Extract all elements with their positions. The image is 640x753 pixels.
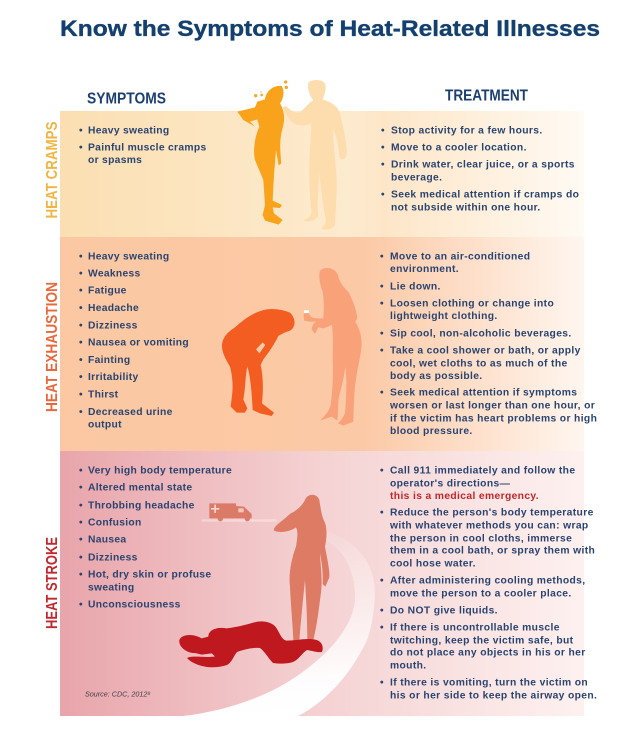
treatment list: heat exhaustion: Sip cool, non-alcoholic beverages. [390, 328, 572, 340]
treatment list: heat stroke: move the person to a cooler place. [390, 588, 572, 600]
symptoms list: heat cramps [79, 126, 206, 166]
symptoms list: heat stroke: Hot, dry skin or profuse [88, 570, 211, 580]
symptoms list: heat exhaustion: • [79, 390, 83, 400]
illustration: heat cramps figures [237, 80, 347, 230]
treatment list: heat stroke: Do NOT give liquids. [390, 606, 498, 616]
symptoms list: heat exhaustion: • [79, 252, 83, 262]
treatment list: heat cramps: Stop activity for a few hours. [391, 126, 543, 136]
treatment list: heat stroke: Call 911 immediately and follow the [390, 466, 575, 476]
treatment list: heat exhaustion: cool, wet cloths to as much of the [390, 358, 568, 370]
title: Know the Symptoms of Heat-Related Illnesses [60, 16, 600, 41]
treatment list: heat cramps: • [381, 142, 385, 154]
treatment list: heat stroke: the person in cool cloths, immerse [390, 534, 572, 544]
symptoms list: heat exhaustion: • [79, 355, 83, 366]
treatment list: heat stroke: mouth. [390, 660, 426, 672]
symptoms list: heat exhaustion: Fatigue [88, 286, 127, 296]
symptoms list: heat exhaustion: • [79, 268, 83, 280]
symptoms list: heat stroke: • [79, 600, 83, 610]
symptoms list: heat stroke: • [79, 500, 83, 512]
treatment list: heat stroke: Reduce the person's body temperature [390, 508, 594, 518]
source note: Source: CDC, 2012⁸ [85, 690, 150, 698]
treatment list: heat stroke: • [380, 606, 384, 616]
panel: heat stroke [44, 451, 597, 716]
label: heat cramps: HEAT CRAMPS [44, 121, 61, 218]
treatment list: heat stroke [380, 466, 597, 702]
icon: dizzy marks [254, 80, 288, 97]
figure: helper man [283, 80, 347, 230]
illustration: heat exhaustion figures [222, 268, 362, 426]
treatment list: heat stroke: cool hose water. [390, 558, 476, 570]
symptoms list: heat exhaustion: Heavy sweating [88, 252, 169, 262]
treatment list: heat cramps: • [381, 126, 385, 136]
treatment list: heat stroke: this is a medical emergency. [390, 491, 539, 502]
symptoms list: heat stroke: Dizziness [88, 552, 138, 564]
treatment list: heat exhaustion: worsen or last longer than one hour, or [389, 400, 595, 412]
treatment list: heat cramps: beverage. [391, 172, 442, 184]
symptoms list: heat cramps: • [79, 142, 83, 154]
treatment list: heat stroke: do not place any objects in his or her [390, 648, 586, 658]
treatment list: heat exhaustion: • [380, 282, 384, 292]
treatment list: heat cramps: Drink water, clear juice, or a sports [391, 160, 575, 170]
figure: woman on phone [274, 495, 329, 641]
treatment list: heat exhaustion: Seek medical attention if symptoms [390, 388, 577, 398]
symptoms list: heat exhaustion [79, 252, 189, 430]
treatment list: heat cramps: • [381, 160, 385, 170]
symptoms list: heat exhaustion: • [79, 286, 83, 296]
figure: woman with cramps [237, 86, 284, 225]
symptoms list: heat stroke: Confusion [88, 518, 142, 528]
treatment list: heat cramps: • [381, 190, 385, 200]
symptoms list: heat stroke: Very high body temperature [88, 466, 232, 476]
symptoms list: heat exhaustion: Fainting [88, 355, 130, 366]
treatment list: heat exhaustion: • [380, 252, 384, 262]
symptoms list: heat stroke [79, 466, 232, 610]
symptoms list: heat exhaustion: Decreased urine [88, 407, 173, 418]
treatment list: heat stroke: his or her side to keep the airway open. [390, 690, 597, 702]
symptoms list: heat cramps: or spasms [88, 155, 142, 166]
label: heat exhaustion: HEAT EXHAUSTION [44, 282, 61, 412]
treatment list: heat stroke: If there is uncontrollable muscle [390, 622, 560, 634]
treatment list: heat stroke: operator's directions— [390, 478, 511, 490]
treatment list: heat exhaustion: • [380, 388, 384, 398]
symptoms list: heat stroke: Altered mental state [88, 482, 192, 494]
symptoms list: heat exhaustion: Headache [88, 303, 139, 314]
symptoms list: heat stroke: Unconsciousness [88, 600, 181, 610]
treatment list: heat stroke: • [380, 576, 384, 586]
symptoms list: heat exhaustion: output [88, 420, 122, 430]
treatment list: heat exhaustion: lightweight clothing. [390, 311, 498, 322]
treatment list: heat exhaustion: • [380, 328, 384, 340]
treatment list: heat exhaustion: Move to an air-conditioned [390, 252, 530, 262]
treatment list: heat exhaustion [380, 252, 597, 437]
symptoms list: heat stroke: • [79, 482, 83, 494]
icon: ambulance [209, 503, 252, 521]
heading: treatment: TREATMENT [445, 88, 528, 105]
treatment list: heat exhaustion: body as possible. [390, 371, 483, 382]
symptoms list: heat cramps: • [79, 126, 83, 136]
treatment list: heat exhaustion: environment. [390, 264, 459, 275]
treatment list: heat exhaustion: Loosen clothing or change into [390, 298, 554, 310]
symptoms list: heat cramps: Painful muscle cramps [88, 142, 206, 154]
symptoms list: heat exhaustion: • [79, 320, 83, 332]
treatment list: heat cramps: Move to a cooler location. [391, 142, 527, 154]
symptoms list: heat exhaustion: Nausea or vomiting [88, 338, 189, 348]
figure: bent-over man [222, 309, 294, 416]
symptoms list: heat exhaustion: • [79, 303, 83, 314]
treatment list: heat cramps: Seek medical attention if cramps do [391, 190, 579, 200]
treatment list: heat exhaustion: if the victim has heart problems or high [390, 414, 597, 424]
illustration: heat stroke scene [179, 495, 375, 716]
heading: symptoms: SYMPTOMS [87, 90, 166, 107]
symptoms list: heat stroke: • [79, 534, 83, 546]
symptoms list: heat exhaustion: • [79, 338, 83, 348]
panel: heat exhaustion [44, 237, 597, 451]
treatment list: heat stroke: twitching, keep the victim safe, but [390, 636, 574, 646]
treatment list: heat exhaustion: • [380, 346, 384, 356]
road curve [183, 532, 375, 716]
symptoms list: heat exhaustion: • [79, 372, 83, 383]
treatment list: heat stroke: • [380, 678, 384, 688]
symptoms list: heat cramps: Heavy sweating [88, 126, 169, 136]
symptoms list: heat exhaustion: Thirst [88, 390, 119, 400]
symptoms list: heat stroke: • [79, 552, 83, 564]
road line [202, 519, 277, 522]
treatment list: heat exhaustion: • [380, 298, 384, 310]
treatment list: heat exhaustion: Take a cool shower or bath, or apply [390, 346, 581, 356]
treatment list: heat stroke: After administering cooling methods, [390, 576, 585, 586]
label: heat stroke: HEAT STROKE [44, 537, 61, 629]
treatment list: heat stroke: If there is vomiting, turn the victim on [390, 678, 588, 688]
treatment list: heat exhaustion: blood pressure. [390, 426, 473, 437]
symptoms list: heat exhaustion: • [79, 407, 83, 418]
symptoms list: heat exhaustion: Weakness [88, 268, 141, 280]
symptoms list: heat exhaustion: Irritability [88, 372, 139, 383]
treatment list: heat stroke: • [380, 622, 384, 634]
treatment list: heat stroke: • [380, 508, 384, 518]
figure: woman offering water [304, 268, 362, 426]
treatment list: heat cramps [381, 126, 579, 214]
treatment list: heat stroke: • [380, 466, 384, 476]
symptoms list: heat exhaustion: Dizziness [88, 320, 138, 332]
icon: glass of water [304, 310, 309, 313]
treatment list: heat exhaustion: Lie down. [390, 282, 441, 292]
treatment list: heat stroke: with whatever methods you can: wrap [389, 520, 589, 532]
treatment list: heat stroke: them in a cool bath, or spray them with [390, 546, 595, 556]
symptoms list: heat stroke: sweating [88, 582, 134, 594]
treatment list: heat cramps: not subside within one hour. [391, 202, 541, 214]
symptoms list: heat stroke: Throbbing headache [88, 500, 195, 512]
symptoms list: heat stroke: • [79, 518, 83, 528]
symptoms list: heat stroke: • [79, 466, 83, 476]
panel: heat cramps [44, 111, 584, 237]
symptoms list: heat stroke: Nausea [88, 534, 126, 546]
figure: collapsed man [179, 621, 323, 667]
symptoms list: heat stroke: • [79, 570, 83, 580]
